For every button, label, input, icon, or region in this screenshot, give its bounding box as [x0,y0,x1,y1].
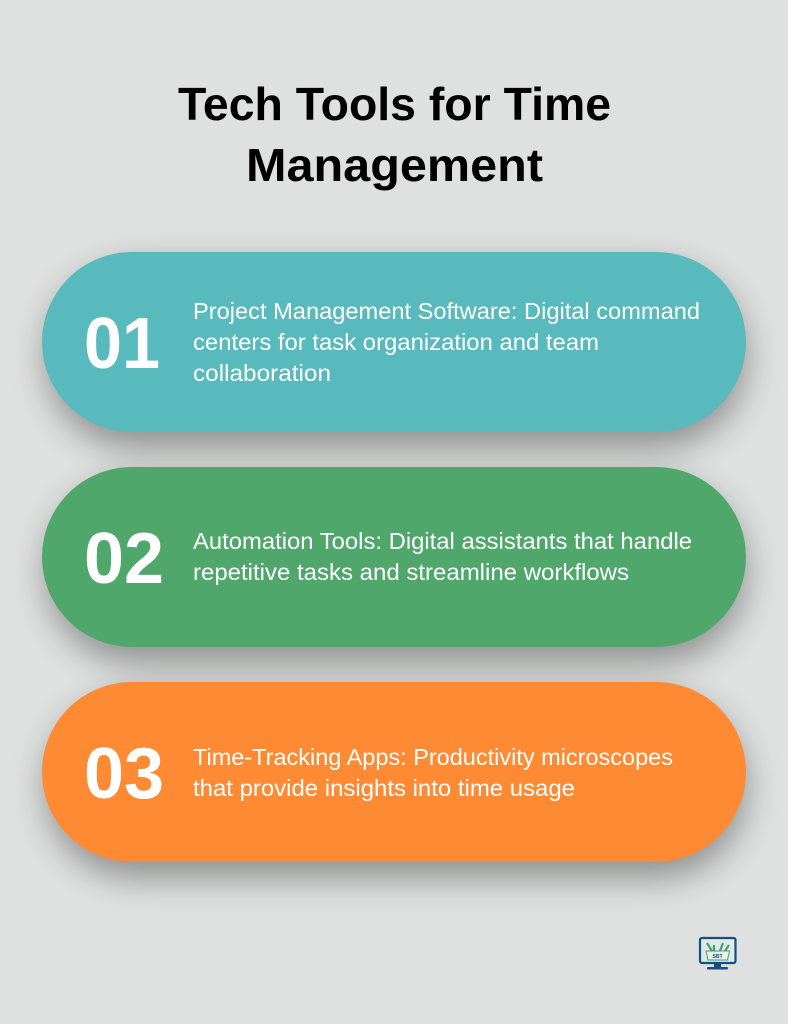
text: project management software: centers for task organization and team [193,329,599,355]
text: time-tracking apps [193,744,673,801]
icon: monitor logo [700,938,736,970]
text: automation tools: Automation Tools: Digital assistants that handle [193,528,692,554]
number 01: 01 [84,304,160,384]
text: project management software: Project Management Software: Digital command [193,298,700,324]
number 03: 03 [84,734,164,814]
icon: monitor logo: SBT [712,954,722,960]
text: project management software [193,298,700,386]
number 02: 02 [84,519,164,599]
title [178,78,611,191]
text: automation tools [193,528,692,585]
title: Tech Tools for Time [178,78,611,130]
panel: project management software [42,252,746,448]
text: project management software: collaboration [193,360,331,386]
panel: time-tracking apps [42,682,746,878]
text: time-tracking apps: that provide insights into time usage [193,775,575,801]
panel: automation tools [42,467,746,663]
text: time-tracking apps: Time-Tracking Apps: Productivity microscopes [193,744,673,770]
title: Management [246,139,543,191]
text: automation tools: repetitive tasks and streamline workflows [193,559,629,585]
